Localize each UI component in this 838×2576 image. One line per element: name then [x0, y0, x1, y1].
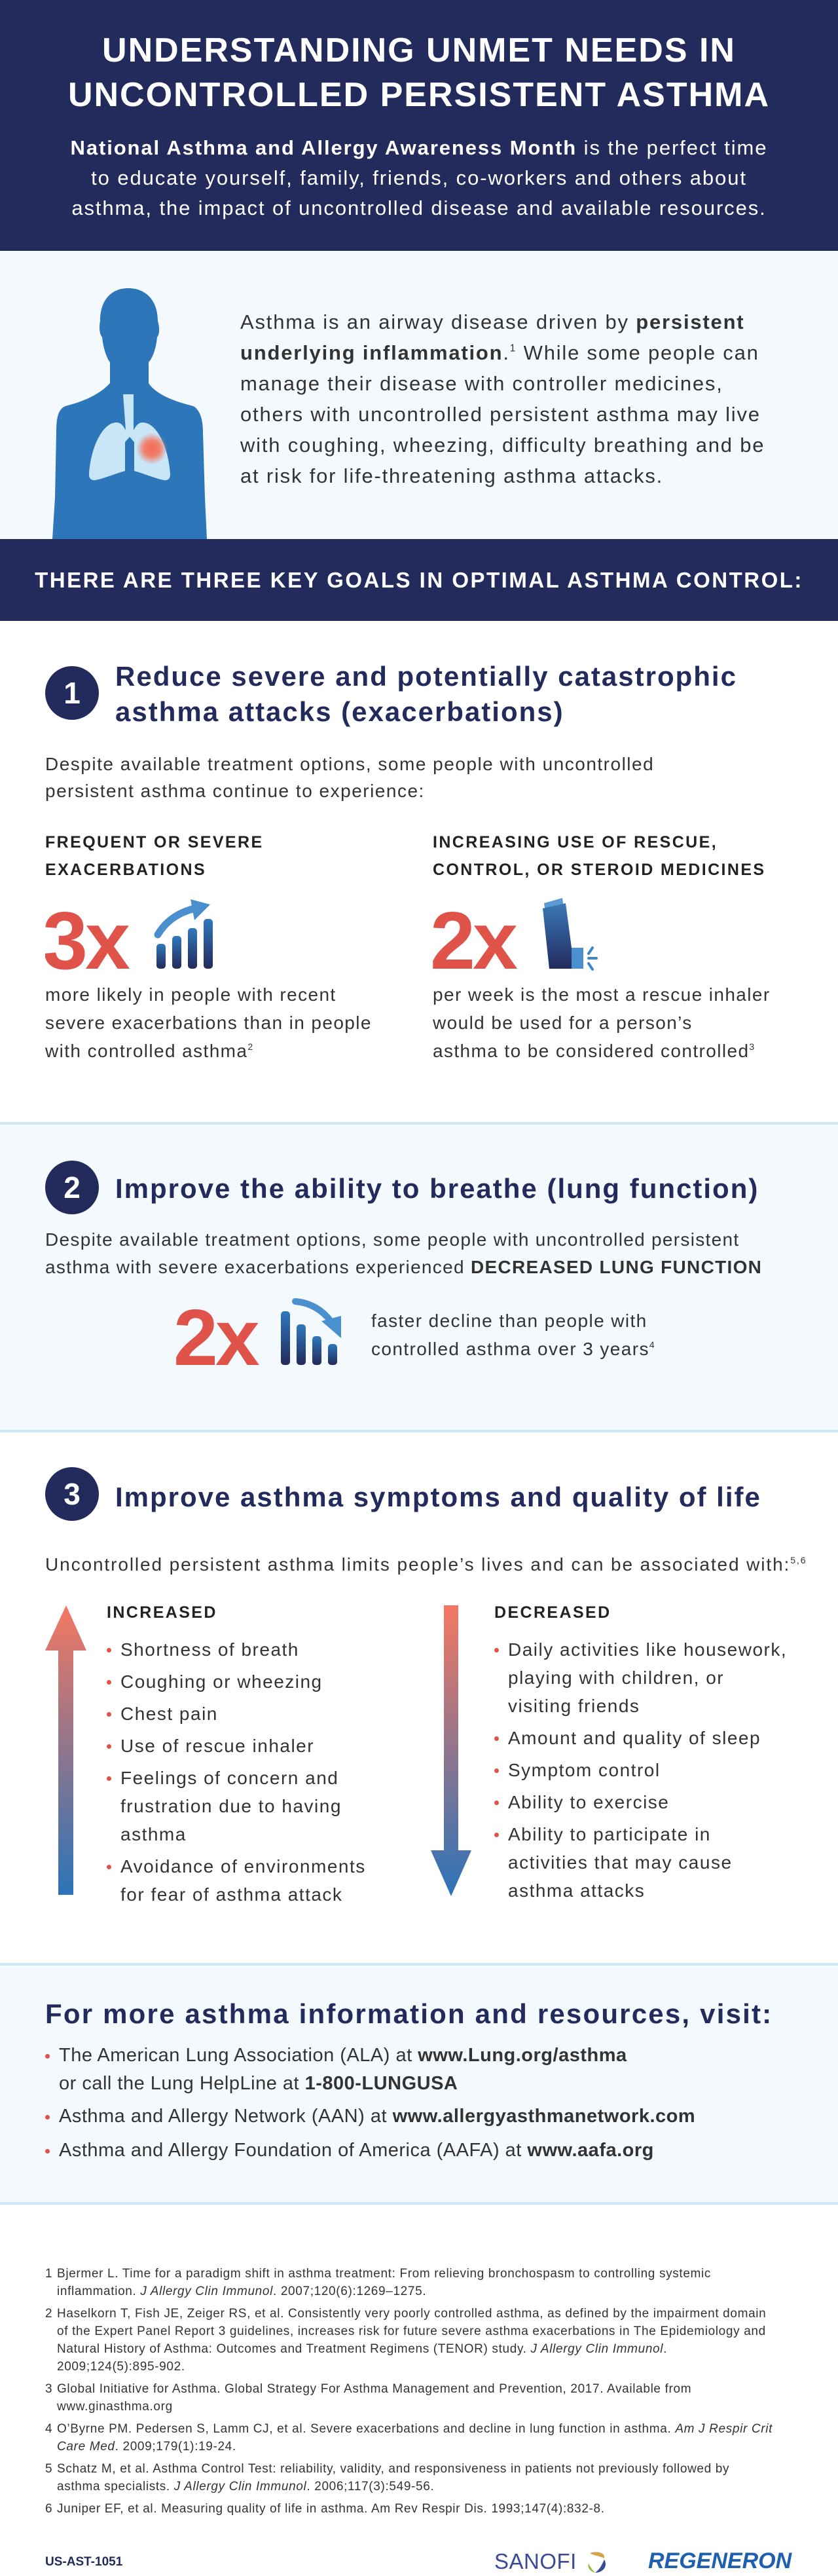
list: resources: The American Lung Association (ALA) at www.Lung.org/asthma	[59, 2045, 627, 2066]
stat: 3x exacerbations: severe exacerbations than in people	[45, 1013, 372, 1033]
list: decreased: DECREASED	[494, 1603, 611, 1622]
references: Bjermer L. Time for a paradigm shift in asthma treatment: From relieving bronchospasm to controlling systemic	[57, 2267, 711, 2281]
stat: 2x rescue inhaler	[433, 833, 771, 1061]
list: increased: asthma	[120, 1824, 187, 1844]
stat: 3x exacerbations: EXACERBATIONS	[45, 861, 206, 879]
list: decreased	[494, 1603, 787, 1901]
list: decreased: activities that may cause	[508, 1852, 733, 1873]
list: increased: Feelings of concern and	[120, 1768, 338, 1788]
panel: resources	[0, 1963, 838, 2205]
text block: asthma description: with coughing, wheezing, difficulty breathing and be	[240, 434, 765, 457]
list: resources: Asthma and Allergy Network (AAN) at www.allergyasthmanetwork.com	[59, 2106, 695, 2127]
header panel	[0, 0, 838, 251]
references	[45, 2267, 773, 2516]
heading 1	[115, 661, 737, 727]
subtitle	[71, 136, 767, 219]
list: increased: Coughing or wheezing	[120, 1671, 323, 1692]
panel: intro	[0, 251, 838, 539]
list: decreased: asthma attacks	[508, 1880, 645, 1901]
logo: regeneron: REGENERON	[648, 2548, 792, 2573]
references: 3	[45, 2382, 52, 2396]
text 2	[45, 1229, 762, 1277]
subtitle: asthma, the impact of uncontrolled disease and available resources.	[71, 196, 767, 219]
references: 5	[45, 2462, 52, 2476]
references: 4	[45, 2422, 52, 2436]
list: decreased: Symptom control	[508, 1760, 661, 1780]
title: UNDERSTANDING UNMET NEEDS IN	[102, 31, 736, 69]
references: 2009;124(5):895-902.	[57, 2360, 185, 2374]
stat: 2x rescue inhaler: would be used for a person’s	[433, 1013, 693, 1033]
list: increased: Shortness of breath	[120, 1639, 299, 1660]
big number 2x with inhaler icon	[433, 896, 598, 973]
heading band: three key goals	[0, 539, 838, 621]
list: increased: frustration due to having	[120, 1796, 342, 1816]
stat: 2x rescue inhaler: asthma to be considered controlled3	[433, 1041, 756, 1061]
list: increased: Chest pain	[120, 1704, 218, 1724]
references: Haselkorn T, Fish JE, Zeiger RS, et al. Consistently very poorly controlled asthma, as defined by the impairment domain	[57, 2307, 766, 2321]
panel: goal 3	[45, 1467, 807, 1905]
references: asthma specialists. J Allergy Clin Immunol. 2006;117(3):549-56.	[57, 2480, 434, 2493]
references: Natural History of Asthma: Outcomes and Treatment Regimens (TENOR) study. J Allergy Clin Immunol.	[57, 2342, 667, 2356]
list: decreased: playing with children, or	[508, 1668, 724, 1688]
big number 3x with bar icon	[45, 896, 213, 973]
stat: 3x exacerbations	[45, 833, 372, 1061]
list: resources: or call the Lung HelpLine at 1-800-LUNGUSA	[59, 2073, 458, 2094]
text 2: Despite available treatment options, some people with uncontrolled persistent	[45, 1229, 739, 1250]
text block: asthma description: manage their disease with controller medicines,	[240, 372, 723, 395]
number badge 1	[45, 666, 99, 720]
list: decreased: Daily activities like housework,	[508, 1639, 787, 1660]
references: inflammation. J Allergy Clin Immunol. 2007;120(6):1269–1275.	[57, 2285, 426, 2298]
text block: asthma description: others with uncontrolled persistent asthma may live	[240, 403, 761, 426]
list: increased: Avoidance of environments	[120, 1856, 366, 1876]
text block: asthma description: at risk for life-threatening asthma attacks.	[240, 464, 663, 487]
references: Global Initiative for Asthma. Global Strategy For Asthma Management and Prevention, 2017. Available from	[57, 2382, 691, 2396]
references: Juniper EF, et al. Measuring quality of life in asthma. Am Rev Respir Dis. 1993;147(4):832-8.	[57, 2502, 605, 2516]
heading 1: Reduce severe and potentially catastrophic	[115, 661, 737, 692]
subtitle: National Asthma and Allergy Awareness Month is the perfect time	[71, 136, 767, 159]
number badge 2	[45, 1161, 99, 1214]
references: www.ginasthma.org	[57, 2400, 173, 2414]
text block: asthma description: underlying inflammation.1 While some people can	[240, 341, 759, 364]
heading 1: asthma attacks (exacerbations)	[115, 696, 564, 727]
stat: 2x lung decline: controlled asthma over 3 years4	[371, 1339, 655, 1359]
stat: 3x exacerbations: FREQUENT OR SEVERE	[45, 833, 264, 851]
title: UNCONTROLLED PERSISTENT ASTHMA	[68, 76, 770, 114]
intro text 1: Despite available treatment options, some people with uncontrolled	[45, 754, 654, 774]
references: Care Med. 2009;179(1):19-24.	[57, 2440, 236, 2454]
heading 2: Improve the ability to breathe (lung function)	[115, 1173, 759, 1204]
list: increased	[107, 1603, 366, 1905]
references: O’Byrne PM. Pedersen S, Lamm CJ, et al. Severe exacerbations and decline in lung function in asthma. Am J Respir Crit	[57, 2422, 773, 2436]
panel: goal 2	[0, 1122, 838, 1432]
arrow: up	[45, 1605, 86, 1895]
list: decreased: Amount and quality of sleep	[508, 1728, 761, 1748]
references: 1	[45, 2267, 52, 2281]
subtitle: to educate yourself, family, friends, co-workers and others about	[91, 166, 747, 189]
list: resources	[45, 2045, 695, 2161]
text block: asthma description: Asthma is an airway disease driven by persistent	[240, 310, 744, 333]
number badge 1: 1	[64, 676, 81, 710]
panel: goal 1	[45, 661, 771, 1061]
list: decreased: Ability to participate in	[508, 1824, 711, 1844]
references: Schatz M, et al. Asthma Control Test: reliability, validity, and responsiveness in patients not previously followed by	[57, 2462, 729, 2476]
stat: 2x lung decline: faster decline than people with	[371, 1311, 647, 1331]
arrow: down	[431, 1605, 471, 1896]
intro text 1: persistent asthma continue to experience:	[45, 781, 425, 801]
references: 2	[45, 2307, 52, 2321]
stat: 2x rescue inhaler: per week is the most a rescue inhaler	[433, 984, 771, 1005]
number badge 3: 3	[64, 1477, 81, 1511]
logo: sanofi: SANOFI	[494, 2549, 577, 2573]
heading band: three key goals: THERE ARE THREE KEY GOALS IN OPTIMAL ASTHMA CONTROL:	[35, 568, 803, 592]
number badge 2: 2	[64, 1170, 81, 1204]
list: decreased: visiting friends	[508, 1696, 640, 1716]
heading 3: Improve asthma symptoms and quality of life	[115, 1482, 761, 1512]
heading: resources: For more asthma information and resources, visit:	[45, 1998, 773, 2029]
icon: body with lungs	[52, 288, 207, 539]
stat: 2x rescue inhaler: INCREASING USE OF RESCUE,	[433, 833, 718, 851]
text 2: asthma with severe exacerbations experienced DECREASED LUNG FUNCTION	[45, 1257, 762, 1277]
references: 6	[45, 2502, 52, 2516]
list: decreased: Ability to exercise	[508, 1792, 669, 1812]
footer code: US-AST-1051	[45, 2555, 122, 2569]
intro text 1	[45, 754, 654, 801]
list: increased: INCREASED	[107, 1603, 217, 1622]
stat: 2x lung decline	[173, 1295, 655, 1370]
stat: 2x rescue inhaler: CONTROL, OR STEROID MEDICINES	[433, 861, 766, 879]
intro text 3: Uncontrolled persistent asthma limits people’s lives and can be associated with:5,6	[45, 1554, 807, 1575]
number badge 3	[45, 1467, 99, 1521]
title	[68, 31, 770, 114]
stat: 3x exacerbations: with controlled asthma2	[45, 1041, 254, 1061]
text block: asthma description	[240, 310, 765, 487]
stat: 3x exacerbations: more likely in people with recent	[45, 984, 337, 1005]
references: of the Expert Panel Report 3 guidelines, increases risk for future severe asthma exacerbations in The Epidemiology and	[57, 2324, 766, 2338]
list: resources: Asthma and Allergy Foundation of America (AAFA) at www.aafa.org	[59, 2140, 654, 2161]
list: increased: for fear of asthma attack	[120, 1884, 342, 1905]
list: increased: Use of rescue inhaler	[120, 1736, 314, 1756]
